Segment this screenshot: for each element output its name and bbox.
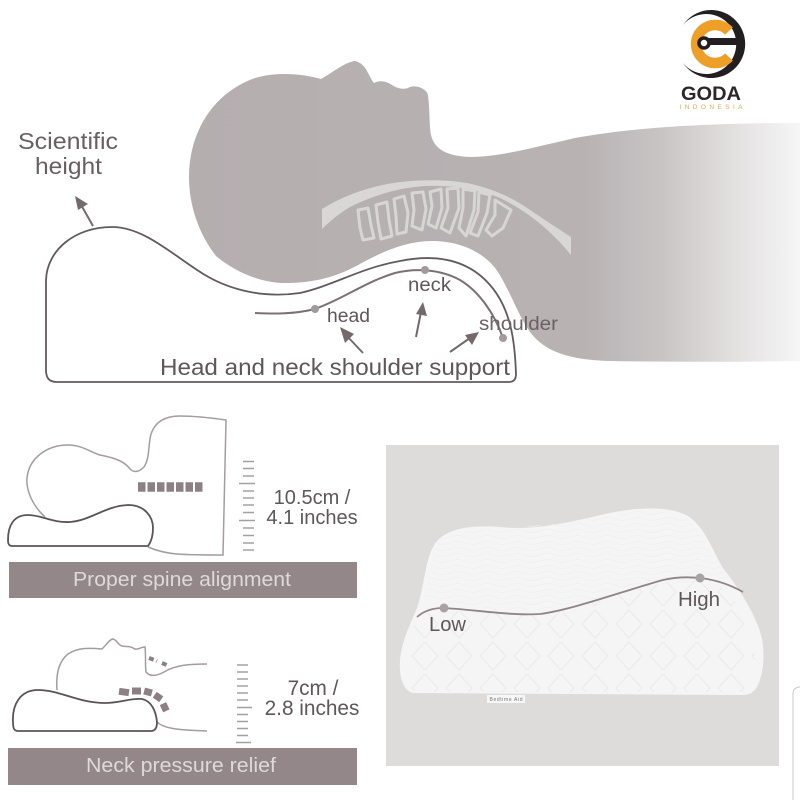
corner of overlay card xyxy=(793,687,800,800)
head outline xyxy=(57,639,207,690)
measurement: 10.5cm / 4.1 inches: 10.5cm / xyxy=(274,487,351,509)
label: head and neck shoulder support: Head and neck shoulder support xyxy=(160,354,510,380)
logo wordmark: GODA xyxy=(681,84,741,105)
ruler xyxy=(239,462,255,550)
shoulder outline xyxy=(157,722,207,731)
head outline xyxy=(27,416,226,555)
panel: neck pressure relief xyxy=(8,639,359,785)
pillow tag: Bedtime Aid xyxy=(490,697,523,703)
panel: proper spine alignment xyxy=(8,416,358,598)
side quilted texture xyxy=(404,578,755,692)
photo background xyxy=(386,445,779,766)
pillow inner support line xyxy=(255,270,503,338)
alignment dashes xyxy=(138,482,204,492)
banner text: Neck pressure relief xyxy=(86,754,276,777)
pillow top surface xyxy=(400,508,764,695)
icon: logo orange C xyxy=(696,25,729,63)
arched arrow over spine xyxy=(322,180,571,255)
banner text: Proper spine alignment xyxy=(73,568,291,591)
spine vertebrae xyxy=(358,188,511,240)
body silhouette xyxy=(189,61,800,362)
point: low xyxy=(440,604,448,612)
arrow: head xyxy=(340,327,363,353)
arrow: neck xyxy=(416,302,427,337)
label: scientific height: height xyxy=(35,153,103,179)
measurement: 7cm / 2.8 inches: 7cm / xyxy=(288,677,339,700)
label: scientific height: Scientific xyxy=(18,128,118,154)
icon: logo G bar xyxy=(708,38,738,45)
pillow outline xyxy=(46,227,516,382)
seam line xyxy=(417,577,743,617)
label: neck: neck xyxy=(408,275,452,296)
point: head xyxy=(311,305,319,313)
top fabric texture xyxy=(425,511,735,610)
measurement: 7cm / 2.8 inches: 2.8 inches xyxy=(265,697,359,720)
point: high xyxy=(696,574,704,582)
arrow: scientific height xyxy=(75,196,93,226)
neck dashes xyxy=(149,658,169,666)
point: neck xyxy=(421,266,429,274)
pillow outline xyxy=(8,505,153,546)
panel: pillow photo xyxy=(386,445,779,766)
arrow: shoulder xyxy=(450,332,479,352)
banner: neck pressure relief xyxy=(8,748,357,785)
pillow tag xyxy=(487,695,525,703)
pillow outline xyxy=(13,690,157,731)
label: head: head xyxy=(327,306,370,327)
icon: logo node xyxy=(699,38,709,48)
main diagram: head and neck on pillow xyxy=(18,61,800,382)
logo: GODA Indonesia xyxy=(680,10,745,111)
label: low: Low xyxy=(429,614,467,636)
logo subtitle: INDONESIA xyxy=(680,104,743,111)
icon: logo outer black crescent xyxy=(683,10,745,78)
label: shoulder: shoulder xyxy=(479,313,559,335)
label: high: High xyxy=(678,588,720,611)
point: shoulder xyxy=(499,334,507,342)
measurement: 10.5cm / 4.1 inches: 4.1 inches xyxy=(266,507,358,529)
ruler xyxy=(236,665,252,742)
banner: proper spine alignment xyxy=(9,562,357,598)
curved pressure dashes xyxy=(119,688,170,712)
